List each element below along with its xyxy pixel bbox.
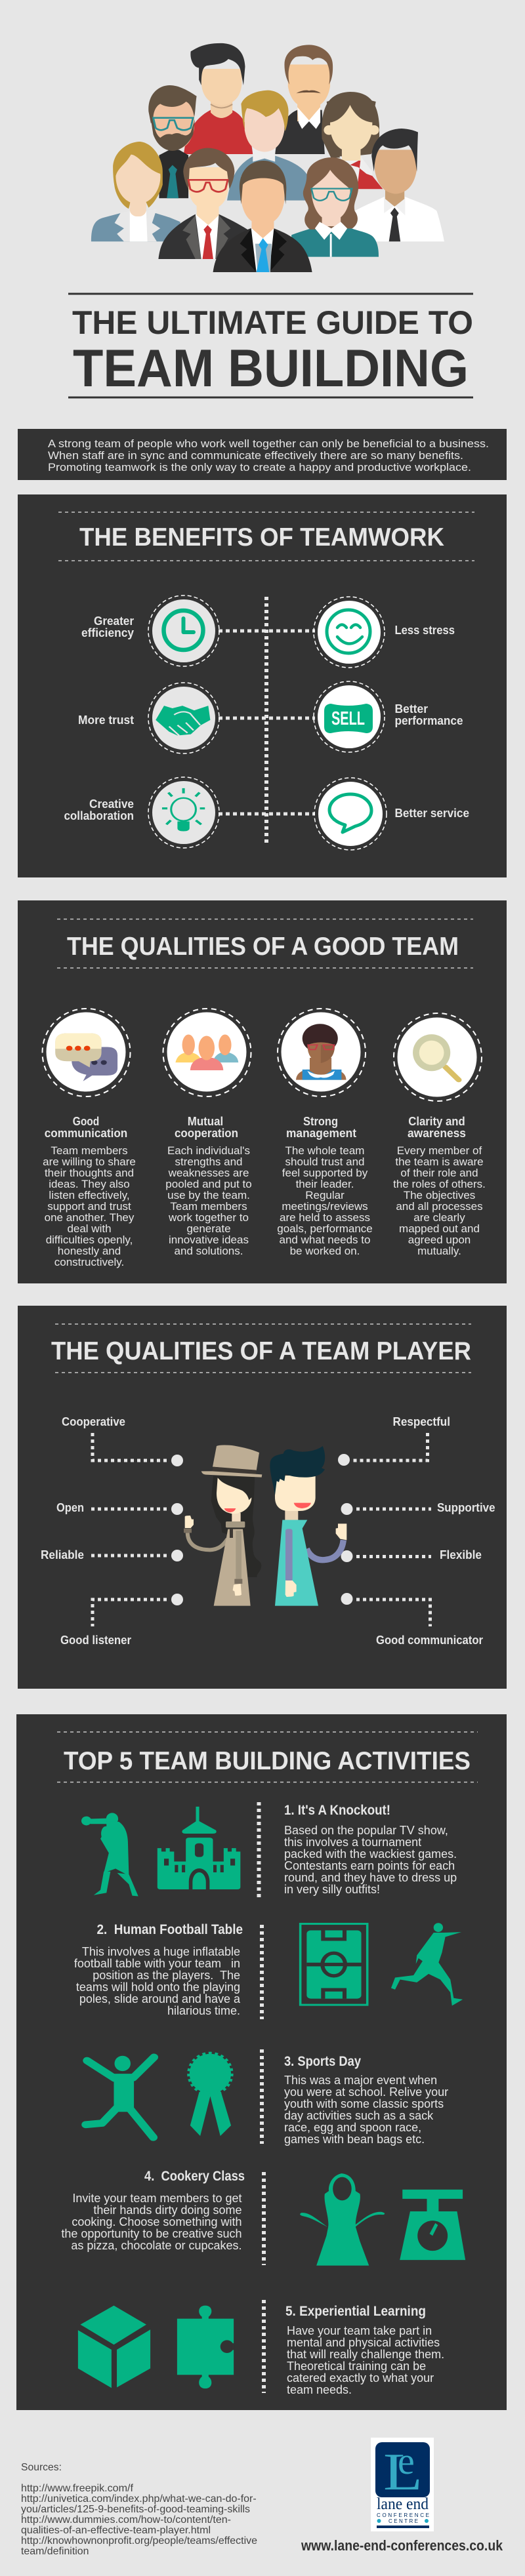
text 3: you were at school. Relive your — [284, 2085, 448, 2099]
text 3: This was a major event when — [284, 2074, 437, 2087]
text 5 — [287, 2324, 444, 2396]
quality: mutual cooperation: Mutual — [188, 1115, 223, 1128]
labels: qualities: Respectful — [392, 1415, 450, 1428]
benefit: more trust: More trust — [78, 714, 134, 727]
quality: clarity and awareness: mutually. — [417, 1245, 461, 1257]
text 2: teams will hold onto the playing — [76, 1981, 240, 1994]
text 4: cooking. Choose something with — [72, 2215, 242, 2228]
quality: good communication: communication — [45, 1127, 127, 1140]
sources list: team/definition — [21, 2546, 89, 2557]
benefit: greater efficiency: efficiency — [81, 626, 134, 639]
benefit: greater efficiency: Greater — [94, 614, 134, 628]
quality: mutual cooperation — [163, 1009, 252, 1257]
heading 2: 2. Human Football Table — [97, 1922, 243, 1937]
heading 3: 3. Sports Day — [284, 2054, 361, 2069]
text 4: Invite your team members to get — [72, 2192, 242, 2205]
icon: rosette — [190, 2054, 231, 2136]
icon: boxer — [81, 1813, 138, 1896]
text 3: race, egg and spoon race, — [284, 2121, 421, 2134]
text 4: their hands dirty doing some — [93, 2204, 242, 2217]
person: woman in teal top — [291, 157, 379, 257]
text 5: that will really challenge them. — [287, 2348, 444, 2361]
labels: qualities: Good listener — [60, 1634, 131, 1647]
benefit: creative collaboration: collaboration — [64, 809, 134, 822]
labels: qualities — [41, 1415, 495, 1647]
text 4: as pizza, chocolate or cupcakes. — [71, 2239, 242, 2252]
text 1: Based on the popular TV show, — [284, 1824, 448, 1837]
quality: strong management: The whole team — [285, 1144, 364, 1157]
quality: good communication: ideas. They also — [49, 1178, 130, 1190]
icon: puzzle piece — [177, 2306, 234, 2388]
quality: strong management: feel supported by — [282, 1167, 368, 1179]
text 3: youth with some classic sports — [284, 2097, 444, 2110]
quality: good communication: constructively. — [54, 1256, 124, 1268]
illustration: man with teal coat — [270, 1446, 346, 1606]
sources list: http://knowhownonprofit.org/people/teams/effective — [21, 2535, 257, 2546]
person: blond woman — [91, 142, 180, 241]
text 5: catered exactly to what your — [287, 2371, 434, 2385]
quality: mutual cooperation: work together to — [168, 1211, 249, 1224]
benefit: less stress — [314, 597, 455, 668]
panel: introduction — [18, 429, 507, 480]
title line 1: THE ULTIMATE GUIDE TO — [72, 304, 473, 341]
logo: lane end conference centre: L — [383, 2444, 423, 2501]
activity 4: cookery class — [61, 2169, 465, 2266]
person: front man in black suit — [213, 161, 312, 272]
sources list: http://www.dummies.com/how-to/content/ten- — [21, 2514, 231, 2526]
quality: clarity and awareness: Every member of — [397, 1144, 482, 1157]
person: man with moustache — [275, 45, 333, 154]
labels: qualities: Good communicator — [376, 1634, 483, 1647]
intro text: When staff are in sync and communicate effectively there are so many benefits. — [48, 449, 463, 462]
panel: the benefits of teamwork — [18, 494, 507, 877]
benefit: greater efficiency — [81, 595, 219, 666]
benefit: better performance: Better — [395, 702, 428, 715]
activity 1: it's a knockout — [81, 1803, 457, 1896]
quality: good communication: listen effectively, — [49, 1189, 130, 1201]
sources list: qualities-of-an-effective-team-player.html — [21, 2525, 211, 2536]
quality: clarity and awareness: of their role and — [400, 1167, 478, 1179]
connectors and dots — [91, 1433, 431, 1626]
quality: mutual cooperation: pooled and put to — [165, 1178, 252, 1190]
benefit: better performance: performance — [395, 714, 463, 727]
panel: top 5 team building activities — [16, 1714, 507, 2410]
heading 1: 1. It's A Knockout! — [284, 1803, 390, 1818]
text 2: position as the players. The — [93, 1969, 240, 1982]
text 3 — [284, 2074, 448, 2146]
logo: lane end conference centre: CENTRE — [388, 2518, 418, 2524]
quality: strong management: be worked on. — [290, 1245, 360, 1257]
benefit: better service — [314, 778, 469, 850]
labels: qualities: Open — [56, 1501, 84, 1514]
panel: the qualities of a team player — [18, 1306, 507, 1689]
sources list: Sources: — [21, 2462, 62, 2473]
quality: strong management: management — [286, 1127, 356, 1140]
person: man in red shirt — [184, 43, 253, 154]
text 2: This involves a huge inflatable — [82, 1945, 240, 1958]
quality: strong management: Strong — [303, 1115, 338, 1128]
quality: clarity and awareness: awareness — [408, 1127, 466, 1140]
intro text — [48, 437, 489, 473]
quality: mutual cooperation: Each individual's — [167, 1144, 250, 1157]
text 4: the opportunity to be creative such — [61, 2227, 242, 2240]
text 5: mental and physical activities — [287, 2336, 440, 2349]
text 5: Have your team take part in — [287, 2324, 432, 2337]
heading: team player: THE QUALITIES OF A TEAM PLAYER — [51, 1337, 471, 1365]
labels: qualities: Flexible — [440, 1548, 482, 1561]
quality: good communication: Team members — [51, 1144, 128, 1157]
quality: good communication: Good — [73, 1115, 99, 1128]
icon: kitchen scale — [400, 2190, 465, 2260]
person: dark haired man in white shirt — [350, 129, 444, 241]
icon: apron — [300, 2173, 385, 2266]
text 1: this involves a tournament — [284, 1836, 421, 1849]
dotted dividers — [259, 1802, 264, 2393]
text 1: in very silly outfits! — [284, 1883, 380, 1896]
logo: lane end conference centre: lane end — [377, 2495, 429, 2513]
quality: clarity and awareness: and all processes — [396, 1200, 483, 1213]
benefit: creative collaboration — [64, 777, 219, 848]
sources list: http://www.freepik.com/f — [21, 2483, 134, 2494]
text 3: games with bean bags etc. — [284, 2133, 425, 2146]
activity 3: sports day — [86, 2054, 448, 2146]
text 1: packed with the wackiest games. — [284, 1847, 457, 1861]
quality: strong management: their leader. — [296, 1178, 354, 1190]
text 1: Contestants earn points for each — [284, 1859, 455, 1872]
quality: mutual cooperation: cooperation — [175, 1127, 238, 1140]
text 2: football table with your team in — [74, 1957, 240, 1970]
quality: clarity and awareness: the roles of others. — [393, 1178, 486, 1190]
quality: good communication — [42, 1009, 136, 1268]
quality: strong management — [277, 1009, 373, 1257]
quality: mutual cooperation: weaknesses are — [168, 1167, 249, 1179]
icon: football pitch — [301, 1924, 368, 2005]
quality: clarity and awareness: The objectives — [404, 1189, 475, 1201]
quality: clarity and awareness: are clearly — [413, 1211, 465, 1224]
title block — [68, 292, 473, 399]
text 2 — [74, 1945, 241, 2017]
illustration: woman in hat and coat — [184, 1445, 262, 1606]
illustration: group of team members — [91, 43, 444, 272]
website url: www.lane-end-conferences.co.uk — [301, 2537, 503, 2554]
intro text: A strong team of people who work well together can only be beneficial to a business. — [48, 437, 489, 450]
quality: good communication: honestly and — [58, 1245, 121, 1257]
quality: good communication: difficulties openly, — [46, 1234, 133, 1246]
intro text: Promoting teamwork is the only way to create a happy and productive workplace. — [48, 461, 471, 473]
icon: jumping figure — [86, 2056, 154, 2137]
benefit: better performance — [314, 681, 463, 752]
heading 5: 5. Experiential Learning — [285, 2304, 426, 2319]
quality: mutual cooperation: use by the team. — [167, 1189, 250, 1201]
sources list — [21, 2462, 257, 2557]
text 5: team needs. — [287, 2383, 352, 2396]
logo: lane end conference centre: e — [398, 2440, 415, 2482]
dotted connectors — [219, 597, 315, 843]
quality: strong management: goals, performance — [277, 1222, 373, 1235]
quality: good communication: are willing to share — [43, 1156, 136, 1168]
person: bearded man with glasses — [148, 85, 197, 198]
quality: clarity and awareness: mapped out and — [399, 1222, 480, 1235]
text 4 — [61, 2192, 242, 2252]
person: blond man in blue jacket — [227, 91, 308, 201]
quality: clarity and awareness — [393, 1013, 486, 1257]
quality: mutual cooperation: Team members — [170, 1200, 247, 1213]
logo: lane end conference centre: CONFERENCE — [377, 2512, 429, 2518]
labels: qualities: Supportive — [437, 1501, 495, 1514]
quality: clarity and awareness: Clarity and — [408, 1115, 465, 1128]
benefit: less stress: Less stress — [395, 624, 455, 637]
heading: good team: THE QUALITIES OF A GOOD TEAM — [67, 933, 459, 961]
activity 5: experiential learning — [78, 2304, 444, 2396]
benefit: more trust — [78, 683, 219, 754]
title line 2: TEAM BUILDING — [73, 339, 469, 398]
quality: strong management: meetings/reviews — [282, 1200, 368, 1213]
quality: strong management: and what needs to — [280, 1234, 370, 1246]
benefit: better service: Better service — [395, 807, 469, 820]
quality: mutual cooperation: strengths and — [175, 1156, 243, 1168]
quality: mutual cooperation: and solutions. — [175, 1245, 243, 1257]
text 5: Theoretical training can be — [287, 2360, 426, 2373]
person: man with red glasses — [158, 148, 249, 259]
text 2: hilarious time. — [167, 2004, 240, 2017]
quality: strong management: Regular — [305, 1189, 345, 1201]
quality: good communication: deal with — [67, 1222, 112, 1235]
activity 2: human football table — [74, 1922, 463, 2017]
quality: good communication: one another. They — [45, 1211, 135, 1224]
quality: mutual cooperation: generate — [186, 1222, 231, 1235]
benefit: creative collaboration: Creative — [89, 797, 134, 811]
benefit: better performance: SELL — [331, 708, 365, 729]
quality: mutual cooperation: innovative ideas — [169, 1234, 249, 1246]
heading: activities: TOP 5 TEAM BUILDING ACTIVITIES — [64, 1747, 471, 1775]
quality: clarity and awareness: agreed upon — [408, 1234, 471, 1246]
quality: clarity and awareness: the team is aware — [395, 1156, 484, 1168]
labels: qualities: Cooperative — [62, 1415, 125, 1428]
sources list: http://univetica.com/index.php/what-we-can-do-for- — [21, 2493, 257, 2505]
quality: good communication: support and trust — [47, 1200, 131, 1213]
person: woman with long brown hair — [322, 92, 383, 189]
icon: cube — [78, 2306, 150, 2388]
sources list: you/articles/125-9-benefits-of-good-teaming-skills — [21, 2504, 250, 2515]
text 1 — [284, 1824, 457, 1896]
icon: runner — [391, 1923, 463, 2005]
text 3: day activities such as a sack — [284, 2109, 434, 2122]
heading 4: 4. Cookery Class — [144, 2169, 245, 2184]
quality: good communication: their thoughts and — [45, 1167, 134, 1179]
labels: qualities: Reliable — [41, 1548, 84, 1561]
logo: lane end conference centre — [371, 2438, 434, 2531]
icon: castle — [158, 1807, 240, 1889]
text 2: poles, slide around and have a — [79, 1992, 241, 2005]
text 1: round, and they have to dress up — [284, 1871, 457, 1884]
panel: the qualities of a good team — [18, 900, 507, 1283]
heading: benefits: THE BENEFITS OF TEAMWORK — [79, 523, 444, 552]
quality: strong management: are held to assess — [280, 1211, 370, 1224]
quality: strong management: should trust and — [285, 1156, 364, 1168]
